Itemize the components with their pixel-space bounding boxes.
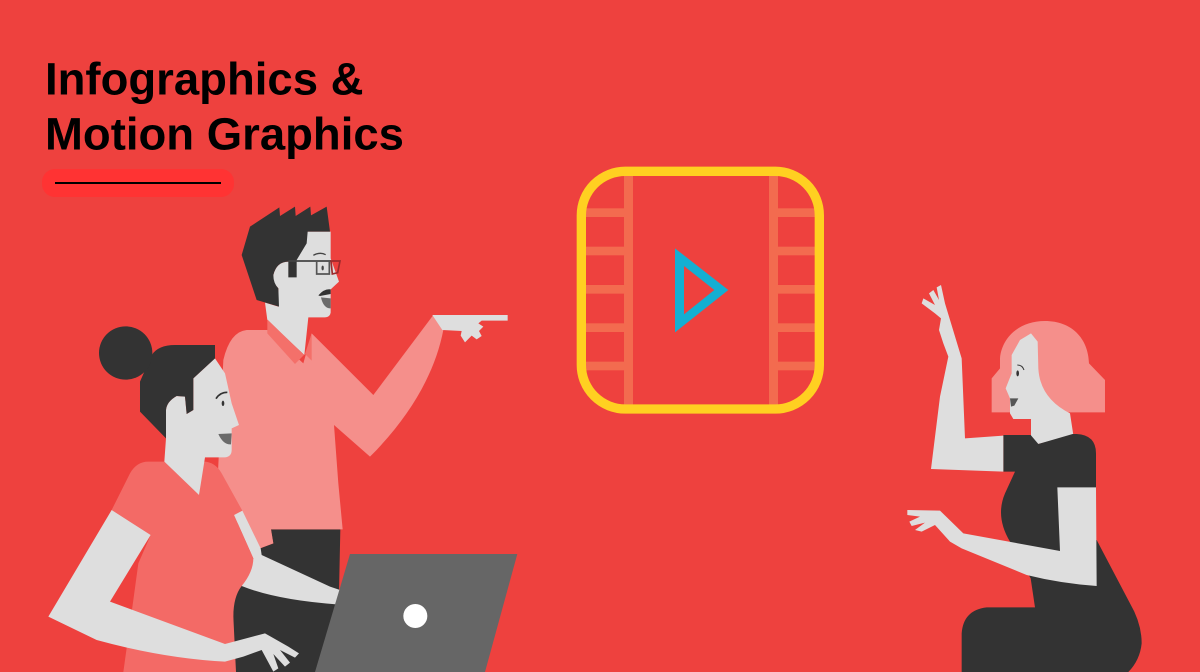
figure: woman gesturing right	[907, 285, 1142, 672]
man pointing hand	[432, 315, 508, 342]
woman shirt	[112, 462, 253, 672]
laptop logo	[403, 604, 427, 628]
woman head	[140, 345, 239, 495]
laptop	[315, 554, 517, 672]
title: Infographics &	[45, 54, 364, 104]
right woman lowered arm	[907, 487, 1097, 586]
right woman raised arm	[922, 285, 1003, 472]
icon: play triangle	[675, 248, 728, 332]
woman far arm	[234, 511, 340, 604]
title underline pill	[42, 169, 234, 197]
right woman head	[992, 321, 1105, 444]
woman hair	[140, 345, 215, 438]
right woman hair	[992, 321, 1105, 412]
woman mouth	[218, 433, 232, 444]
right woman neck and face	[1006, 333, 1073, 444]
figure: man pointing	[217, 207, 508, 672]
right woman mouth	[1010, 398, 1018, 407]
man head	[242, 207, 340, 364]
man eye and brow	[313, 253, 326, 255]
man neck and face	[265, 232, 339, 355]
title	[45, 54, 404, 160]
figure: woman with bun at laptop	[48, 326, 517, 672]
man beard	[321, 297, 331, 308]
title: Motion Graphics	[45, 108, 404, 160]
right woman eye and brow	[1016, 370, 1019, 376]
woman near arm and hand	[48, 510, 299, 672]
man hair	[242, 207, 330, 307]
man moustache	[318, 289, 331, 296]
man sweater	[217, 315, 443, 548]
icon: film strip with play button	[581, 171, 819, 409]
woman trousers	[233, 586, 337, 672]
woman hair bun	[99, 326, 152, 380]
woman neck and face	[164, 358, 239, 495]
man trousers	[233, 529, 340, 672]
man glasses	[288, 261, 340, 274]
woman eye and brow	[222, 401, 224, 406]
right woman dress	[962, 434, 1142, 672]
man collar	[267, 319, 312, 364]
